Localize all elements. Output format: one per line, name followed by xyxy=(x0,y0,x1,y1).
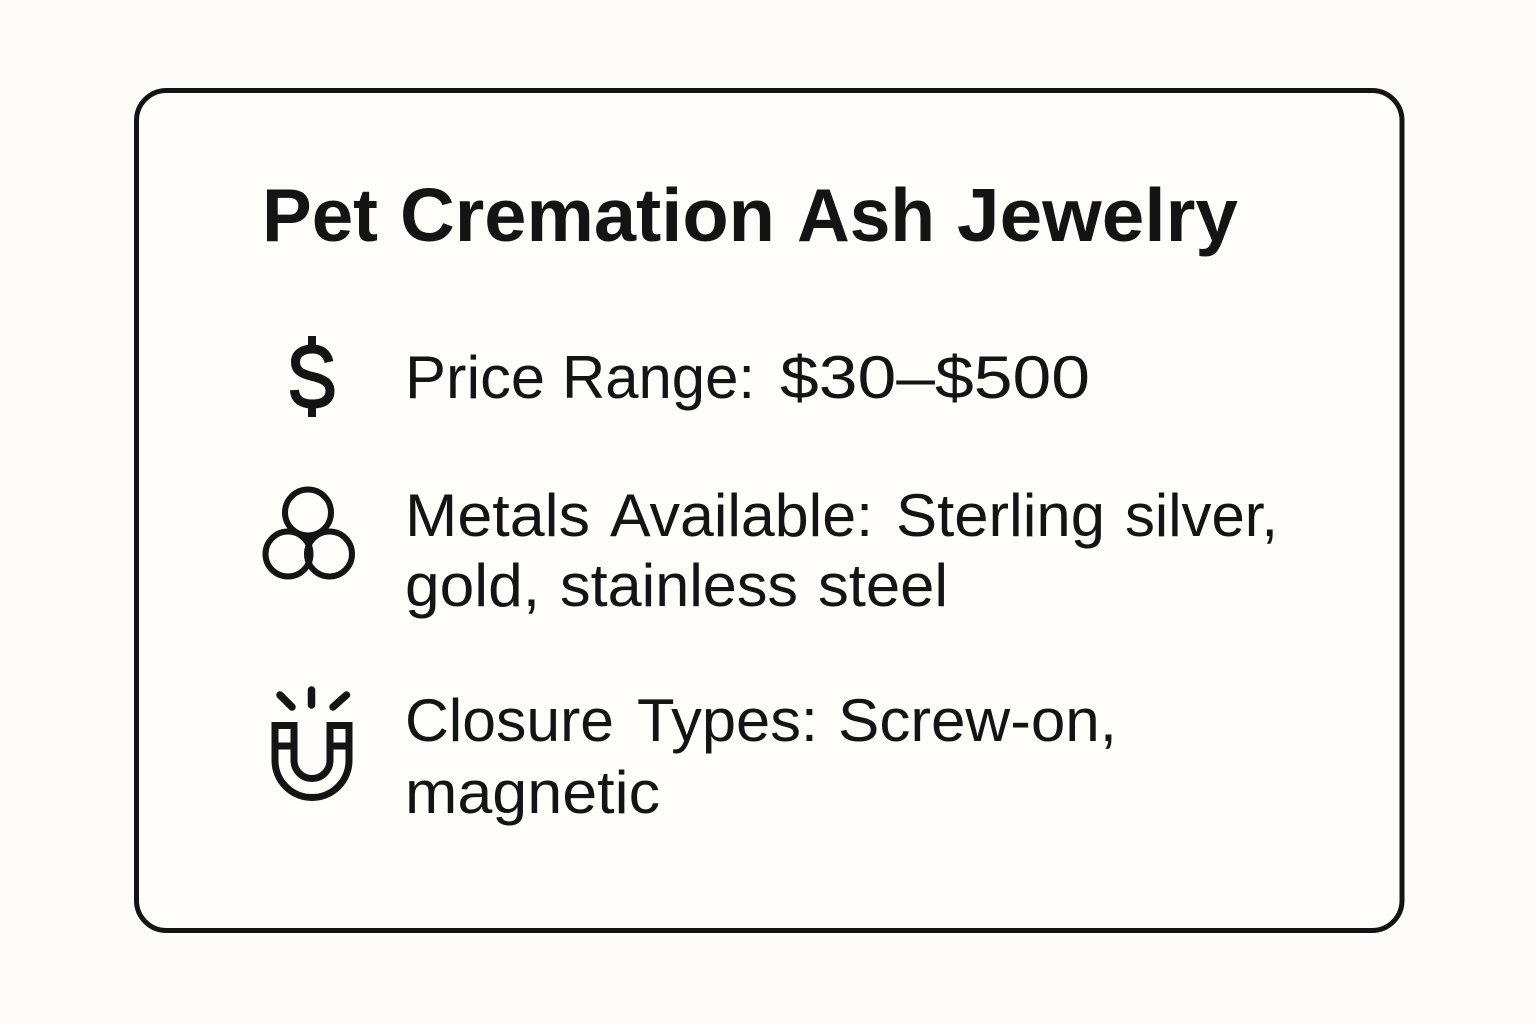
text: metals available: stainless xyxy=(560,552,798,619)
text: metals available xyxy=(405,482,1278,619)
icon: three metal circles xyxy=(266,490,352,576)
title: Jewelry xyxy=(957,173,1238,257)
icon: magnet xyxy=(275,690,349,798)
text: metals available: Metals xyxy=(405,482,590,549)
text: closure types xyxy=(405,687,1117,826)
text: price range: Range: xyxy=(562,344,755,411)
icon: dollar sign xyxy=(294,336,330,417)
panel: card xyxy=(136,90,1402,930)
text: metals available: Available: xyxy=(610,482,873,549)
title: Cremation xyxy=(400,173,775,257)
text: closure types: Closure xyxy=(405,687,614,754)
text: closure types: Types: xyxy=(637,687,818,754)
text: metals available: steel xyxy=(818,552,948,619)
text: metals available: Sterling xyxy=(896,482,1105,549)
text: closure types: magnetic xyxy=(405,759,660,826)
text: closure types: Screw-on, xyxy=(838,687,1117,754)
title: Pet xyxy=(262,173,378,257)
text: metals available: gold, xyxy=(405,552,540,619)
text: metals available: silver, xyxy=(1125,482,1278,549)
text: price range: $30–$500 xyxy=(780,344,1090,411)
title: Ash xyxy=(797,173,935,257)
text: price range: Price xyxy=(405,344,545,411)
